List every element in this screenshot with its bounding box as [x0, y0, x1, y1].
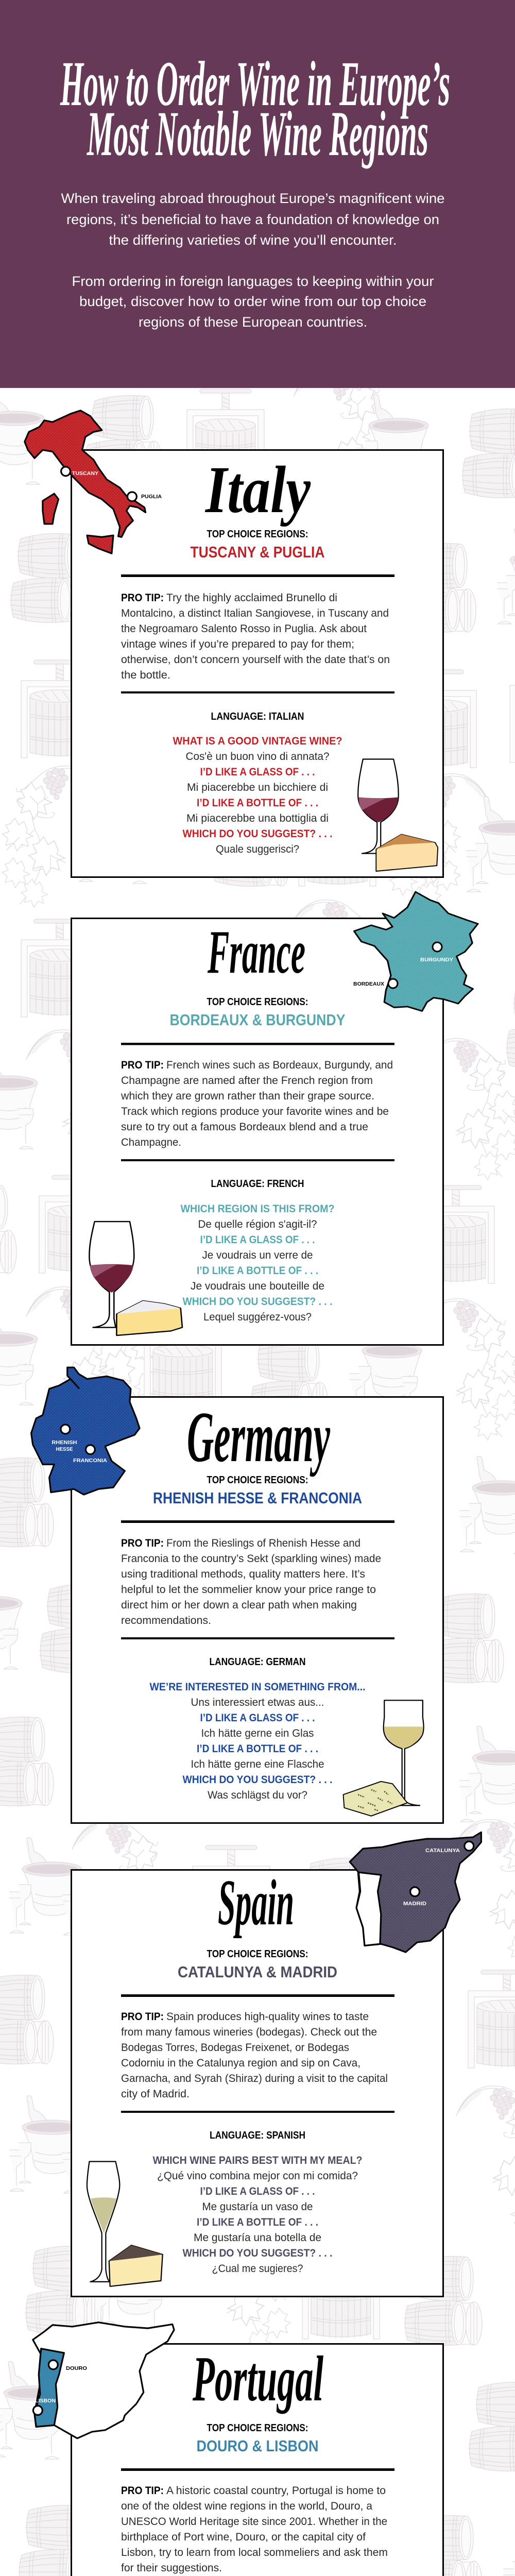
language phrases: ¿Cual me sugieres?	[212, 2263, 303, 2275]
regions heading: TUSCANY & PUGLIA	[191, 543, 324, 561]
language phrases: Lequel suggérez-vous?	[203, 1311, 312, 1323]
heading: France: France	[207, 918, 305, 986]
language phrases	[149, 1656, 366, 1801]
intro text: budget, discover how to order wine from our top choice	[79, 294, 426, 309]
language phrases: Uns interessiert etwas aus...	[191, 1697, 324, 1708]
language phrases: LANGUAGE: SPANISH	[210, 2130, 305, 2141]
language phrases: Me gustaría una botella de	[194, 2232, 321, 2244]
language phrases: Ich hätte gerne ein Glas	[201, 1727, 314, 1739]
language phrases: WHICH DO YOU SUGGEST? . . .	[182, 828, 333, 840]
pro tip: birthplace of Port wine, Douro, or the capital city of	[121, 2531, 366, 2543]
language phrases: Je voudrais une bouteille de	[191, 1280, 324, 1292]
language phrases: Cos'è un buon vino di annata?	[185, 751, 330, 762]
heading: Germany: Germany	[187, 1397, 330, 1477]
pro tip: the bottle.	[121, 669, 170, 681]
language phrases	[152, 2130, 363, 2275]
pro tip: PRO TIP:	[121, 1537, 164, 1549]
language phrases: WHICH REGION IS THIS FROM?	[180, 1203, 335, 1215]
regions heading: RHENISH HESSE & FRANCONIA	[153, 1489, 362, 1507]
pro tip: Lisbon, try to learn from local sommeliers and ask them	[121, 2547, 388, 2558]
regions heading	[191, 529, 324, 561]
pro tip	[121, 1537, 381, 1626]
pro tip: which they are grown rather than their grape source.	[121, 1090, 374, 1102]
icon: white wine and blue cheese	[344, 1700, 424, 1816]
pro tip: Montalcino, a distinct Italian Sangiovese, in Tuscany and	[121, 607, 389, 619]
pro tip	[121, 592, 390, 681]
pro tip: city of Madrid.	[121, 2088, 190, 2100]
map: Spain: CATALUNYA	[425, 1848, 460, 1854]
language phrases: I’D LIKE A BOTTLE OF . . .	[197, 797, 318, 809]
language phrases: I’D LIKE A GLASS OF . . .	[200, 766, 315, 778]
pro tip: for their suggestions.	[121, 2562, 222, 2574]
main title	[60, 48, 450, 169]
pro tip: From the Rieslings of Rhenish Hesse and	[166, 1537, 360, 1549]
language phrases: Mi piacerebbe un bicchiere di	[187, 782, 328, 793]
language phrases	[173, 711, 342, 855]
panel: Portugal	[71, 2344, 443, 2576]
regions heading: TOP CHOICE REGIONS:	[207, 1948, 308, 1960]
regions heading: TOP CHOICE REGIONS:	[207, 529, 308, 540]
map: Germany	[31, 1367, 140, 1495]
pro tip	[121, 1059, 393, 1148]
regions heading	[170, 996, 346, 1029]
pro tip: from many famous wineries (bodegas). Check out the	[121, 2026, 377, 2038]
pro tip: Garnacha, and Syrah (Shiraz) during a visit to the capital	[121, 2073, 388, 2084]
panel: Spain: Spain	[218, 1867, 294, 1939]
language phrases	[180, 1178, 335, 1323]
language phrases: Ich hätte gerne eine Flasche	[191, 1758, 324, 1770]
pro tip: Try the highly acclaimed Brunello di	[166, 592, 337, 604]
icon: sparkling wine and cheese	[87, 2161, 163, 2286]
language phrases: Me gustaría un vaso de	[202, 2201, 313, 2213]
pro tip: helpful to let the sommelier know your price range to	[121, 1584, 376, 1596]
language phrases: Je voudrais un verre de	[202, 1249, 313, 1261]
language phrases: Mi piacerebbe una bottiglia di	[186, 812, 329, 824]
pro tip: PRO TIP:	[121, 1059, 164, 1071]
map: Italy: PUGLIA	[141, 494, 162, 500]
map: Italy	[25, 411, 162, 553]
language phrases: WHICH DO YOU SUGGEST? . . .	[182, 1296, 333, 1308]
regions heading: TOP CHOICE REGIONS:	[207, 2422, 308, 2434]
pro tip: Franconia to the country’s Sekt (sparkling wines) made	[121, 1553, 381, 1565]
language phrases: Was schlägst du vor?	[208, 1789, 307, 1801]
language phrases: WHICH DO YOU SUGGEST? . . .	[182, 1774, 333, 1786]
pro tip: otherwise, don’t concern yourself with the date that’s on	[121, 654, 390, 666]
language phrases: LANGUAGE: ITALIAN	[211, 711, 304, 722]
icon: red wine and cheese	[358, 759, 438, 871]
pro tip: Spain produces high-quality wines to taste	[166, 2011, 369, 2023]
language phrases: I’D LIKE A BOTTLE OF . . .	[197, 1743, 318, 1755]
map: France: BORDEAUX	[353, 981, 384, 987]
map: France: BURGUNDY	[420, 957, 453, 963]
regions heading: BORDEAUX & BURGUNDY	[170, 1011, 346, 1029]
panel: Italy	[71, 450, 443, 877]
pro tip: Track which regions produce your favorite wines and be	[121, 1106, 389, 1117]
pro tip: the Negroamaro Salento Rosso in Puglia. Ask about	[121, 623, 367, 635]
pro tip: using traditional methods, quality matters here. It’s	[121, 1568, 365, 1580]
header panel	[0, 0, 515, 388]
regions heading	[178, 1948, 337, 1981]
pro tip: PRO TIP:	[121, 592, 164, 604]
heading: Italy: Italy	[204, 453, 311, 527]
panel: France	[71, 918, 443, 1345]
pro tip: A historic coastal country, Portugal is home to	[166, 2485, 386, 2497]
intro text: regions, it’s beneficial to have a foundation of knowledge on	[66, 212, 439, 227]
icon: red wine and brie	[89, 1222, 182, 1335]
pro tip: Champagne are named after the French region from	[121, 1075, 373, 1087]
pro tip: one of the oldest wine regions in the world, Douro, a	[121, 2500, 372, 2512]
intro text	[61, 191, 445, 330]
language phrases: I’D LIKE A GLASS OF . . .	[200, 1712, 315, 1724]
intro text: regions of these European countries.	[139, 314, 367, 330]
pro tip: PRO TIP:	[121, 2011, 164, 2023]
panel: Spain	[71, 1867, 443, 2297]
map: Portugal: DOURO	[66, 2365, 87, 2371]
language phrases: De quelle région s'agit-il?	[198, 1218, 317, 1230]
map: Spain	[350, 1832, 481, 1952]
intro text: the differing varieties of wine you’ll encounter.	[109, 232, 397, 248]
map: Italy: TUSCANY	[72, 470, 98, 477]
language phrases: I’D LIKE A BOTTLE OF . . .	[197, 2216, 318, 2228]
intro text: From ordering in foreign languages to keeping within your	[72, 274, 434, 289]
pro tip	[121, 2485, 388, 2574]
map: Germany: RHENISH	[52, 1439, 77, 1446]
regions heading: DOURO & LISBON	[197, 2437, 318, 2455]
language phrases: WHAT IS A GOOD VINTAGE WINE?	[173, 735, 342, 747]
pro tip: Codorniu in the Catalunya region and sip on Cava,	[121, 2057, 360, 2069]
language phrases: LANGUAGE: FRENCH	[211, 1178, 304, 1190]
language phrases: LANGUAGE: GERMAN	[209, 1656, 306, 1668]
language phrases: I’D LIKE A GLASS OF . . .	[200, 2185, 315, 2197]
pro tip: vintage wines if you’re prepared to pay for them;	[121, 638, 354, 650]
heading: Portugal: Portugal	[192, 2344, 323, 2415]
regions heading	[197, 2422, 318, 2455]
pro tip: UNESCO World Heritage site since 2001. Whether in the	[121, 2516, 387, 2528]
regions heading	[153, 1475, 362, 1507]
pro tip: sure to try out a famous Bordeaux blend and a true	[121, 1121, 368, 1133]
pro tip: Bodegas Torres, Bodegas Freixenet, or Bodegas	[121, 2042, 349, 2054]
map: Portugal: LISBON	[35, 2398, 56, 2404]
pro tip: French wines such as Bordeaux, Burgundy, and	[166, 1059, 393, 1071]
map: Portugal	[33, 2323, 174, 2438]
language phrases: Quale suggerisci?	[216, 843, 299, 855]
map: Spain: MADRID	[403, 1901, 426, 1907]
regions heading: TOP CHOICE REGIONS:	[207, 996, 308, 1008]
map: France	[353, 892, 478, 1011]
pro tip: recommendations.	[121, 1615, 211, 1626]
pro tip: direct him or her down a clear path when making	[121, 1599, 357, 1611]
regions heading: CATALUNYA & MADRID	[178, 1963, 337, 1981]
regions heading: TOP CHOICE REGIONS:	[207, 1475, 308, 1486]
panel: Germany	[71, 1397, 443, 1823]
map: Germany: HESSE	[56, 1446, 73, 1452]
pro tip: Champagne.	[121, 1137, 181, 1148]
language phrases: WHICH DO YOU SUGGEST? . . .	[182, 2247, 333, 2259]
pro tip: PRO TIP:	[121, 2485, 164, 2497]
language phrases: I’D LIKE A GLASS OF . . .	[200, 1234, 315, 1246]
language phrases: WE’RE INTERESTED IN SOMETHING FROM...	[149, 1681, 366, 1693]
intro text: When traveling abroad throughout Europe’s magnificent wine	[61, 191, 445, 206]
language phrases: I’D LIKE A BOTTLE OF . . .	[197, 1265, 318, 1277]
language phrases: ¿Qué vino combina mejor con mi comida?	[157, 2170, 358, 2182]
map: Germany: FRANCONIA	[73, 1458, 107, 1464]
pro tip	[121, 2011, 388, 2100]
language phrases: WHICH WINE PAIRS BEST WITH MY MEAL?	[152, 2155, 363, 2166]
